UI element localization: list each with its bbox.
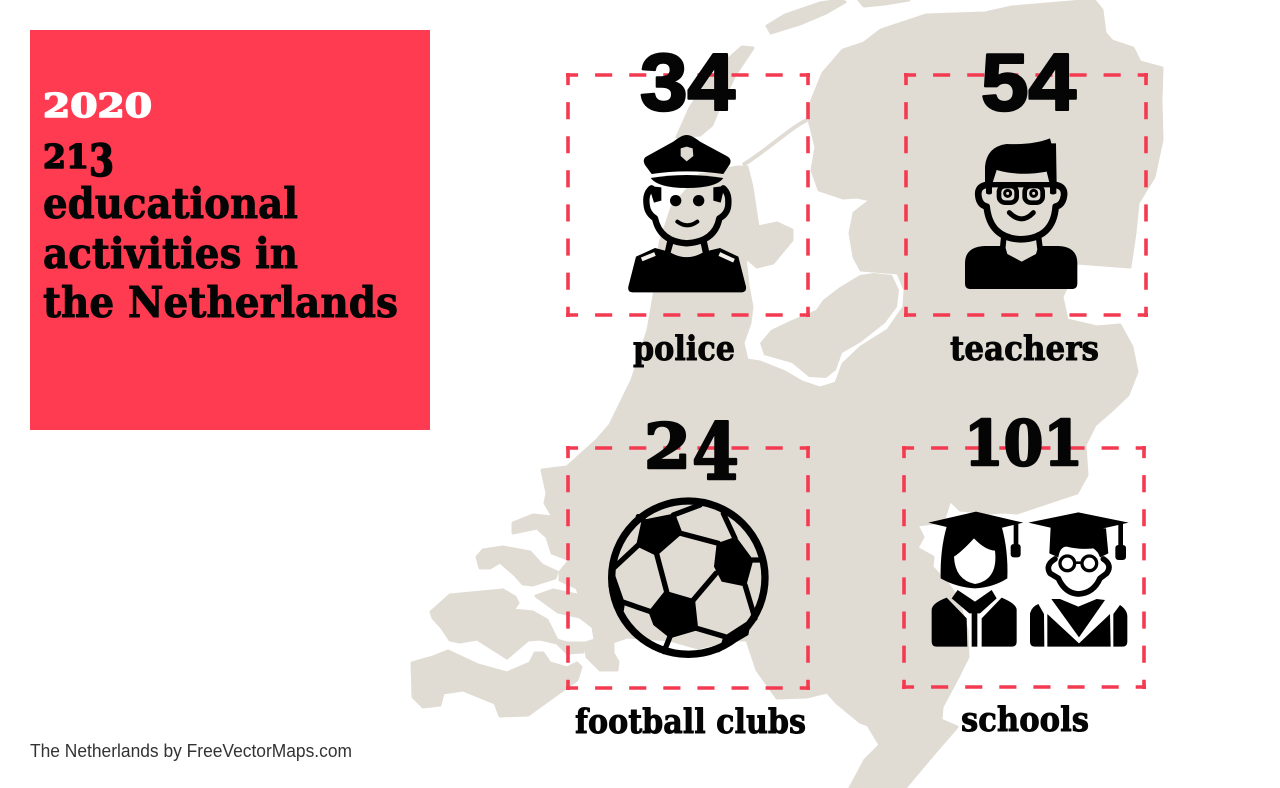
panel: police box — [566, 73, 810, 317]
title line 2: activities in — [43, 229, 298, 278]
label: police: police — [633, 329, 735, 369]
icon: teacher with glasses — [965, 138, 1077, 289]
activity total: 21 — [43, 137, 89, 176]
panel: teachers box — [904, 73, 1148, 317]
activity total: 3 — [89, 136, 114, 187]
label: football clubs: football clubs — [575, 702, 806, 742]
icon: graduates — [928, 512, 1129, 647]
title line 1: educational — [43, 179, 298, 228]
title line 3: the Netherlands — [43, 278, 398, 327]
panel: schools box — [902, 446, 1146, 689]
label: teachers: teachers — [950, 329, 1099, 369]
map of the Netherlands — [412, 0, 1162, 788]
number: football clubs: 2 — [644, 410, 691, 483]
panel: football clubs box — [566, 446, 810, 690]
panel: title — [30, 30, 430, 430]
number: football clubs — [644, 407, 739, 498]
icon: police officer — [628, 135, 746, 292]
number: schools: 101 — [964, 407, 1083, 480]
number: police: 34 — [640, 38, 735, 128]
map credit: The Netherlands by FreeVectorMaps.com — [30, 741, 352, 761]
female graduate — [928, 512, 1023, 647]
year: 2020 — [43, 86, 152, 125]
activity total — [43, 136, 114, 187]
number: football clubs: 4 — [692, 407, 739, 498]
label: schools: schools — [961, 700, 1089, 740]
male graduate — [1028, 512, 1129, 647]
icon: football — [608, 501, 765, 654]
number: teachers: 54 — [981, 38, 1076, 128]
